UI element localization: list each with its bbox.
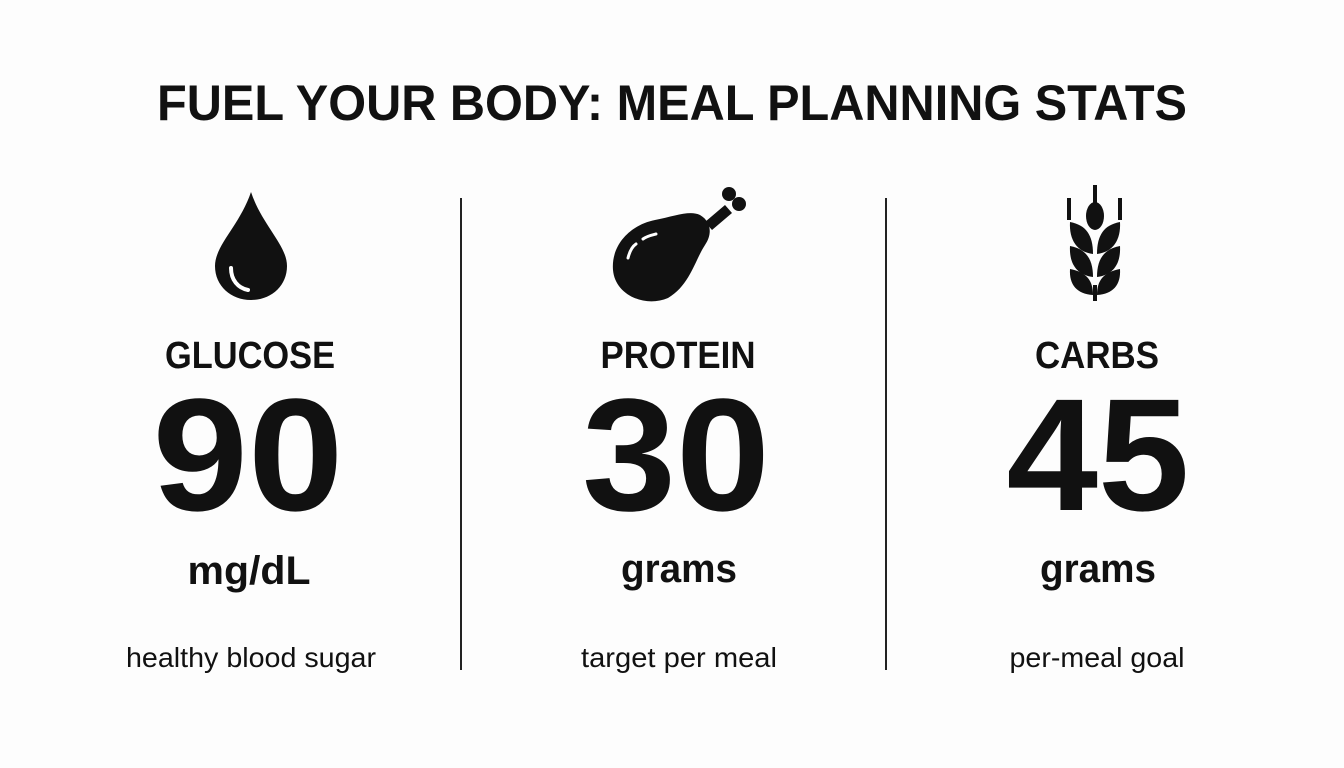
number: 30: 30 bbox=[582, 365, 770, 544]
panel: glucose bbox=[126, 192, 376, 673]
panel: protein bbox=[581, 187, 777, 673]
icon: wheat bbox=[1067, 185, 1122, 301]
unit: grams bbox=[621, 547, 737, 591]
description: per-meal goal bbox=[1010, 642, 1184, 673]
title: FUEL YOUR BODY: MEAL PLANNING STATS bbox=[157, 75, 1187, 131]
number: 90: 90 bbox=[152, 365, 344, 544]
panel: carbs bbox=[1006, 185, 1190, 673]
heading: protein: PROTEIN bbox=[600, 335, 756, 377]
heading: glucose: GLUCOSE bbox=[165, 335, 335, 377]
icon: drumstick bbox=[613, 187, 746, 301]
description: target per meal bbox=[581, 642, 777, 673]
description: healthy blood sugar bbox=[126, 642, 376, 673]
number: 45: 45 bbox=[1006, 365, 1190, 544]
unit: grams bbox=[1040, 547, 1156, 591]
unit: mg/dL bbox=[188, 549, 310, 593]
icon: water drop bbox=[215, 192, 287, 300]
heading: carbs: CARBS bbox=[1035, 335, 1159, 377]
